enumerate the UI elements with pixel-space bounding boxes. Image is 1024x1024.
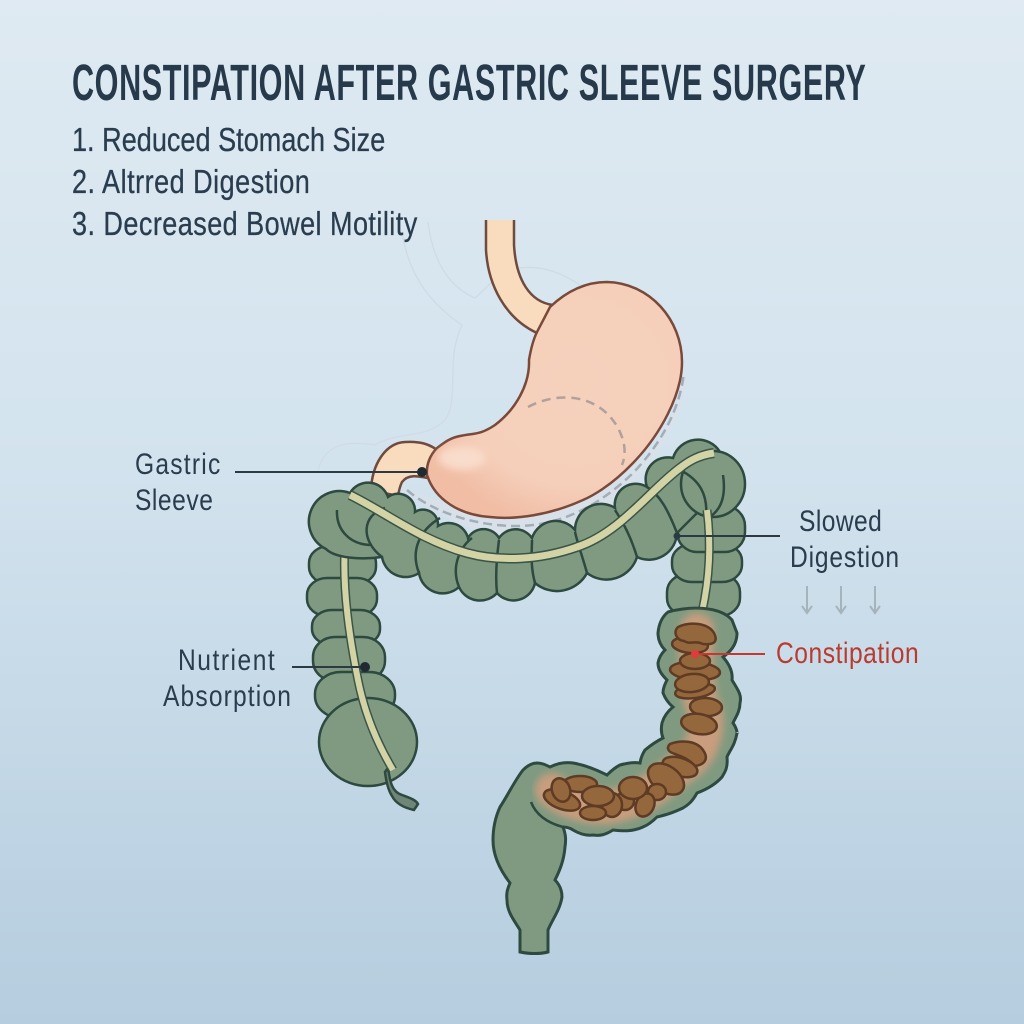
icon: stomach (427, 282, 682, 518)
label: constipation: Constipation (776, 636, 919, 670)
label: gastric sleeve (135, 447, 427, 517)
label: slowed digestion: Digestion (790, 540, 899, 574)
icon: descending band (702, 510, 709, 612)
arrows: slowed movement (802, 586, 880, 613)
icon: ascending band (344, 543, 393, 770)
label: slowed digestion (674, 504, 899, 574)
faint body outline (318, 222, 580, 470)
icon: ascending colon and cecum (307, 546, 418, 810)
label: gastric sleeve: Gastric (135, 447, 220, 481)
label: nutrient absorption: Nutrient (178, 643, 275, 677)
title: CONSTIPATION AFTER GASTRIC SLEEVE SURGERY (72, 54, 866, 111)
list of causes: 3. Decreased Bowel Motility (72, 207, 418, 243)
list of causes: 1. Reduced Stomach Size (72, 123, 385, 159)
icon: inflamed area (552, 630, 706, 807)
list of causes: 2. Altrred Digestion (72, 165, 310, 201)
label: nutrient absorption: Absorption (163, 679, 291, 713)
label: gastric sleeve: Sleeve (135, 483, 213, 517)
icon: esophagus (486, 220, 553, 333)
label: nutrient absorption (163, 643, 370, 713)
icon: splenic flexure (680, 451, 745, 518)
icon: transverse band (350, 453, 714, 559)
icon: rectum inner line (531, 802, 563, 827)
icon: duodenum (371, 442, 440, 496)
icon: descending colon (667, 506, 745, 616)
label: constipation (691, 636, 919, 670)
label: slowed digestion: Slowed (799, 504, 882, 538)
icon: stool masses (541, 624, 722, 820)
list of causes (72, 123, 418, 243)
icon: transverse colon (309, 440, 720, 601)
icon: removed stomach dashed outline (400, 372, 686, 536)
icon: sigmoid colon and rectum (493, 608, 741, 954)
